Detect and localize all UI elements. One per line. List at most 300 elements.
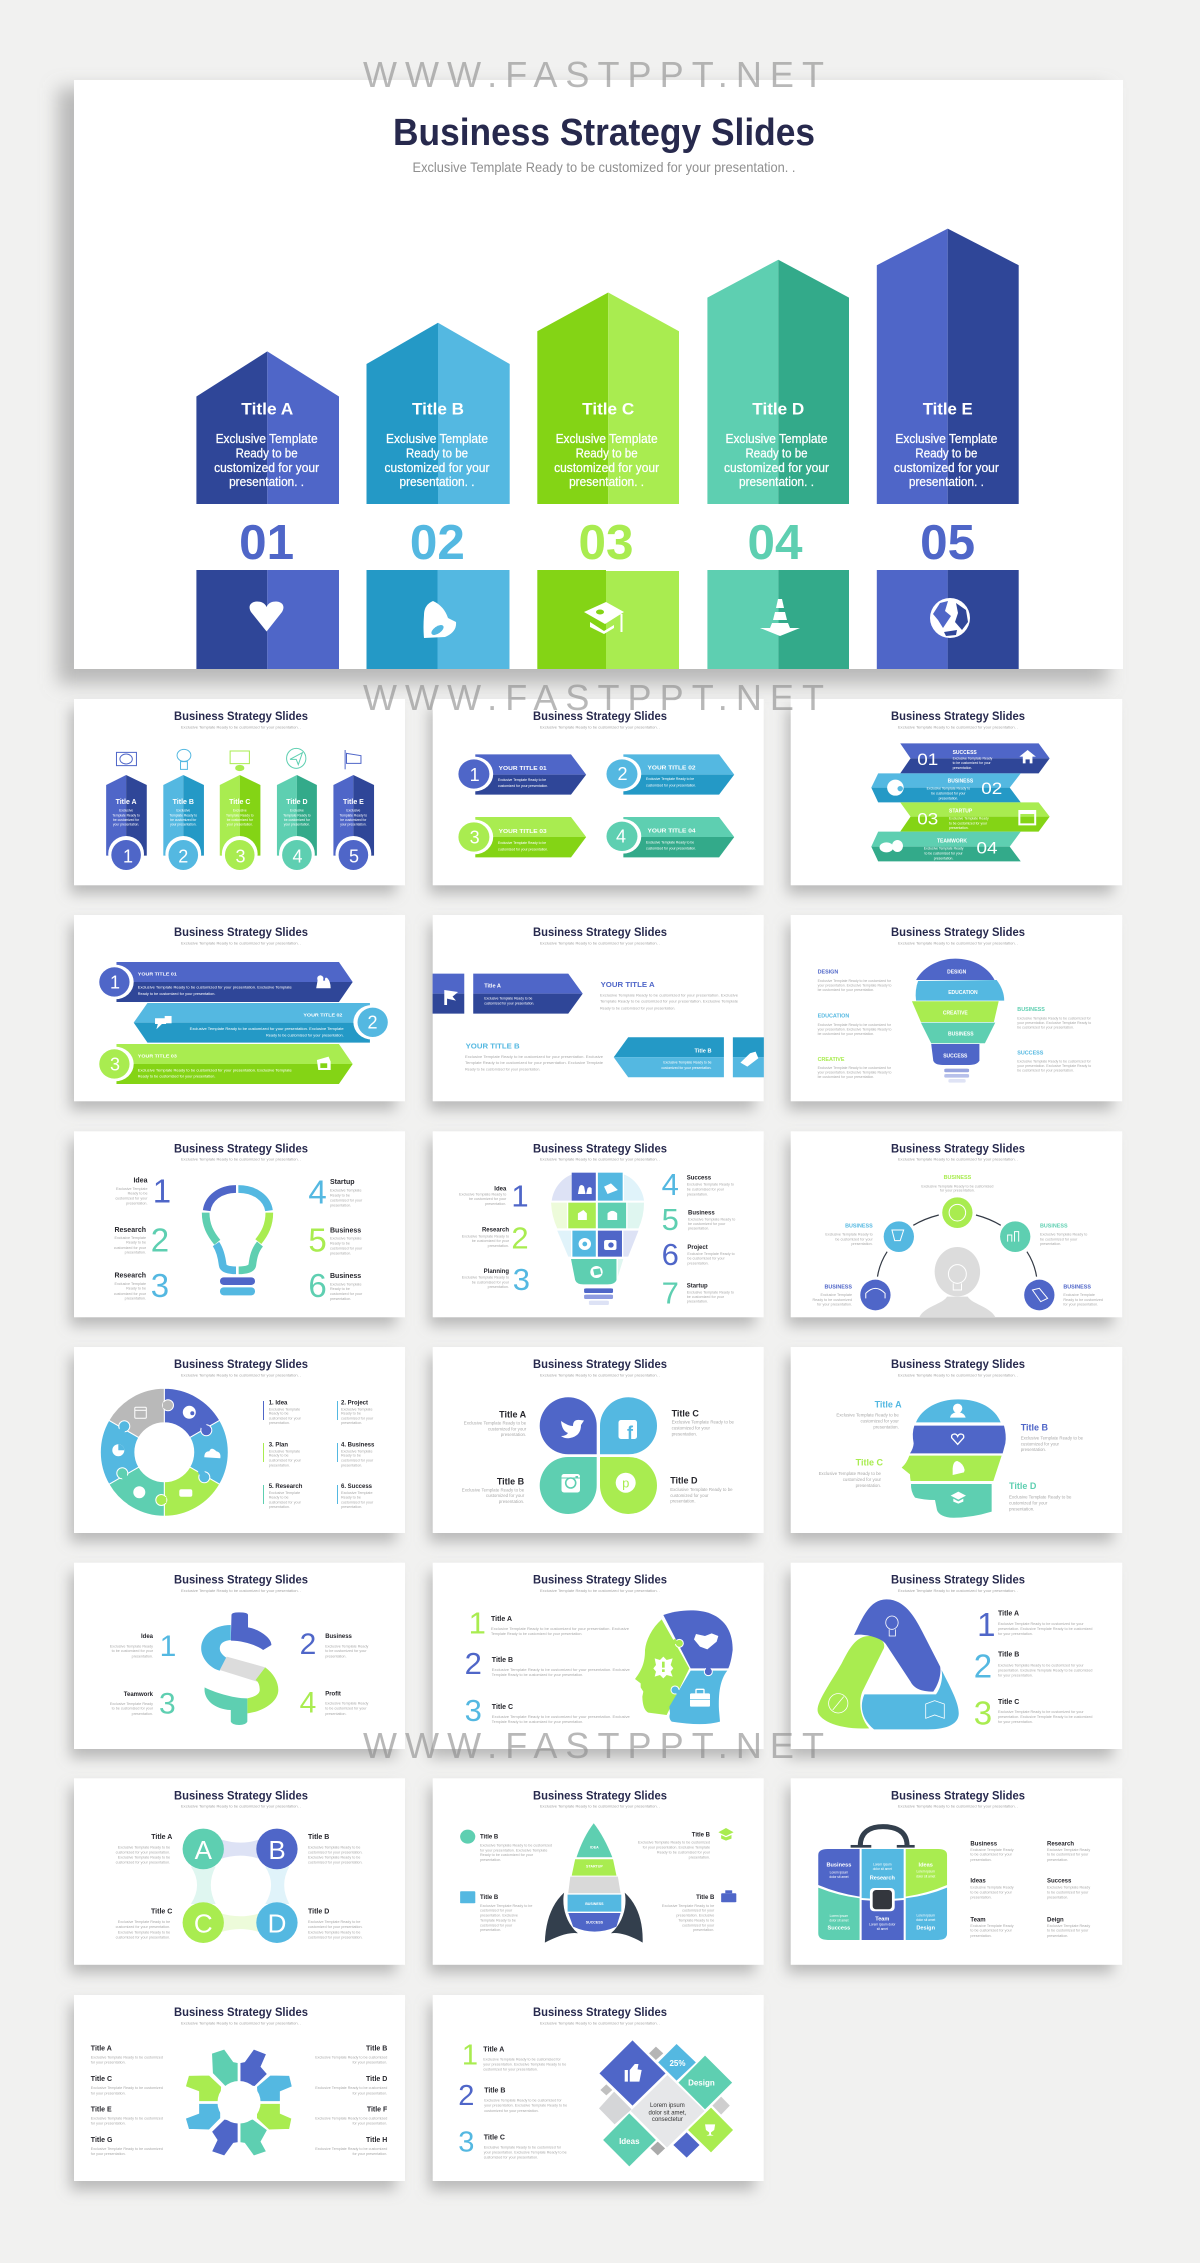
side labels: Exclusive Template Ready to be — [118, 1930, 170, 1934]
dollar labels: presentation. — [132, 1654, 153, 1658]
dollar labels: to be customized for your — [325, 1649, 367, 1653]
arrow labels: 2 — [178, 847, 188, 867]
slide heading: Business Strategy Slides — [891, 1574, 1025, 1587]
long ribbon text: YOUR TITLE 03 — [138, 1053, 177, 1058]
panel: slide 18 briefcase — [791, 1778, 1122, 1965]
side text blocks: your presentation. Exclusive Template Ready to — [1017, 1021, 1091, 1025]
side text blocks: be customized for your presentation. — [818, 1075, 874, 1079]
dollar labels: 1 — [160, 1630, 176, 1663]
long ribbon text: Ready to be customized for your presentation. — [138, 1074, 215, 1078]
band text: be customized for your — [931, 791, 966, 795]
briefcase panel labels: sit amet — [877, 1927, 888, 1931]
numbered text list: your presentation. Exclusive Template Ready to be — [483, 2063, 566, 2067]
diamond cluster — [599, 2040, 733, 2166]
left labels: for your presentation. — [91, 2122, 126, 2126]
band text: Exclusive Template Ready — [949, 816, 989, 820]
ribbon text — [470, 764, 696, 852]
text block A: Exclusive Template Ready to be customized for your presentation. Exclusive — [600, 994, 738, 998]
circle labels: BUSINESS — [824, 1284, 852, 1290]
panel: slide 7 outline bulb — [74, 1131, 405, 1317]
bulb layer labels — [943, 969, 978, 1059]
arrow column B: Exclusive Template — [386, 432, 488, 446]
panel: slide 16 ABCD circles — [74, 1778, 405, 1965]
left labels: Exclusive Template — [114, 1236, 146, 1240]
five arrow shapes with number circles — [106, 775, 374, 872]
slide subtitle: Exclusive Template Ready to be customized for your presentation. . — [181, 1805, 301, 1809]
left labels: for your presentation. — [91, 2091, 126, 2095]
clover labels: Exclusive Template Ready to be — [464, 1420, 527, 1425]
rocket right labels: customized for your — [682, 1923, 715, 1927]
numbers 1 to 6: 6 — [308, 1267, 327, 1304]
arrow labels: Title C — [229, 799, 250, 806]
triangle labels: for your presentation. — [998, 1673, 1033, 1677]
side labels: customized for your presentation. — [116, 1935, 170, 1939]
left labels: customized for your — [114, 1292, 147, 1296]
circle labels: Exclusive Template — [820, 1293, 852, 1297]
circle labels: for your presentation. — [1063, 1303, 1098, 1307]
right labels: for your presentation. — [352, 2091, 387, 2095]
panel: slide 20 diamonds — [433, 1995, 764, 2181]
head labels: Exclusive Template Ready to be — [819, 1471, 882, 1476]
rocket right labels: Exclusive Template Ready to be customized — [638, 1840, 710, 1844]
watermark middle: WWW.FASTPPT.NET — [363, 677, 824, 718]
rocket left labels: Title B — [480, 1895, 499, 1901]
circle letters: D — [268, 1909, 286, 1939]
slide subtitle: Exclusive Template Ready to be customized for your presentation. . — [540, 1373, 660, 1377]
arrow labels: be customized for — [113, 818, 140, 822]
numbered text list: Title C — [484, 2134, 505, 2141]
head labels: Title C — [856, 1458, 883, 1468]
watermark lower: WWW.FASTPPT.NET — [363, 1725, 824, 1766]
left labels: be customized for your — [472, 1239, 510, 1243]
slide subtitle: Exclusive Template Ready to be customized for your presentation. . — [181, 2021, 301, 2025]
panel: slide 4 long ribbons — [74, 915, 405, 1101]
left labels: Planning — [484, 1269, 509, 1275]
right labels: Exclusive Template Ready to — [687, 1290, 734, 1294]
slide heading: Business Strategy Slides — [891, 1789, 1025, 1802]
right labels: Ready to be — [330, 1193, 350, 1197]
right labels: be customized for your — [688, 1222, 726, 1226]
slide heading: Business Strategy Slides — [533, 926, 667, 939]
arrow labels: 4 — [292, 847, 303, 867]
arrow column D — [707, 260, 849, 504]
long ribbon text — [110, 971, 378, 1078]
linked circles — [183, 1829, 298, 1943]
dollar labels: Exclusive Template Ready — [325, 1644, 369, 1648]
numbers 01 to 05: 05 — [920, 516, 975, 570]
slide subtitle: Exclusive Template Ready to be customized for your presentation. . — [181, 725, 301, 729]
briefcase side labels: Exclusive Template Ready — [1047, 1924, 1090, 1928]
triangle labels: Exclusive Template Ready to be customized for your — [998, 1710, 1084, 1714]
text block A: Template Ready to be customized for your presentation. Exclusive Template — [600, 1000, 738, 1004]
triangle labels: Exclusive Template Ready to be customized for your — [998, 1622, 1084, 1626]
dollar labels: 4 — [300, 1686, 316, 1719]
right labels: be customized for your — [687, 1257, 725, 1261]
panel: slide 11 clover — [433, 1347, 764, 1533]
slide heading: Business Strategy Slides — [174, 926, 308, 939]
text block B — [465, 1042, 712, 1072]
numbered text list: customized for your presentation. — [484, 2156, 538, 2160]
puzzle ring labels: presentation. — [341, 1505, 362, 1509]
head labels: presentation. — [1021, 1447, 1046, 1452]
left labels: for your presentation. — [91, 2152, 126, 2156]
numbers 01 to 05: 03 — [578, 516, 634, 570]
right labels: presentation. — [688, 1227, 709, 1231]
right labels: Business — [330, 1227, 361, 1234]
right labels: Exclusive Template Ready to be customized — [315, 2086, 387, 2090]
circle labels: BUSINESS — [845, 1224, 873, 1230]
right labels: Exclusive Template Ready to — [687, 1183, 734, 1187]
side labels: Title C — [151, 1909, 172, 1916]
three long ribbons — [97, 962, 391, 1084]
briefcase side labels: Business — [970, 1841, 998, 1847]
side text blocks: be customized for your presentation. — [1017, 1069, 1074, 1073]
ribbon text: 2 — [617, 764, 628, 784]
right labels: Exclusive Template — [330, 1237, 362, 1241]
arrow column A: presentation. . — [229, 475, 304, 489]
right labels: for your presentation. — [352, 2152, 387, 2156]
left labels: be customized for your — [469, 1197, 507, 1201]
right labels: presentation. — [687, 1192, 708, 1196]
puzzle ring labels: presentation. — [341, 1463, 362, 1467]
slide subtitle: Exclusive Template Ready to be customized for your presentation. . — [898, 1589, 1018, 1593]
clover petals with social icons: p — [622, 1476, 629, 1490]
right labels: Exclusive Template Ready to — [688, 1217, 735, 1221]
puzzle ring labels: customized for your — [341, 1416, 374, 1420]
clover labels: customized for your — [488, 1426, 527, 1431]
triangle labels: Title A — [998, 1611, 1019, 1618]
main title: Business Strategy Slides — [393, 112, 815, 154]
head labels: customized for your — [1021, 1441, 1060, 1446]
arrow labels: be customized for — [340, 818, 367, 822]
rocket right labels: presentation. — [689, 1855, 710, 1859]
right labels — [687, 1176, 735, 1304]
arrow column C: customized for your — [554, 461, 659, 475]
watermark top: WWW.FASTPPT.NET — [363, 54, 824, 95]
right labels: customized for your — [330, 1198, 363, 1202]
briefcase panel labels: dolor sit amet — [916, 1918, 935, 1922]
dollar labels: Exclusive Template Ready — [325, 1702, 369, 1706]
puzzle head numbers and labels: Template Ready to be customized for your presentation. — [492, 1673, 583, 1677]
side text blocks — [818, 970, 1092, 1079]
dollar labels: presentation. — [325, 1654, 347, 1658]
rocket left labels: Ready to be customized for your — [480, 1853, 534, 1857]
head labels: Exclusive Template Ready to be — [1021, 1436, 1084, 1441]
puzzle ring labels: customized for your — [269, 1416, 302, 1420]
rocket left labels: Exclusive Template Ready to be — [480, 1904, 532, 1908]
band text: Exclusive Template Ready — [924, 846, 964, 850]
arrow labels: Exclusive — [119, 809, 133, 813]
head labels: presentation. — [856, 1483, 881, 1488]
arrow column E — [877, 229, 1019, 504]
slide heading: Business Strategy Slides — [174, 1789, 308, 1802]
arrow labels: Exclusive — [233, 809, 247, 813]
puzzle head numbers and labels: 3 — [465, 1693, 482, 1728]
briefcase side labels: presentation. — [1047, 1858, 1068, 1862]
left labels: customized for your — [114, 1246, 147, 1250]
bulb layer labels: CREATIVE — [943, 1011, 968, 1017]
right labels: be customized for your — [687, 1295, 725, 1299]
side text blocks: Exclusive Template Ready to be customized for — [818, 979, 892, 983]
right labels: Business — [330, 1273, 361, 1280]
arrow labels: 3 — [235, 847, 246, 867]
briefcase panel labels: Business — [826, 1863, 851, 1869]
left labels: presentation. — [488, 1285, 509, 1289]
bulb layer labels: EDUCATION — [948, 990, 978, 996]
side text blocks: Exclusive Template Ready to be customized for — [1017, 1060, 1092, 1064]
numbered text list: your presentation. Exclusive Template Ready to be — [484, 2104, 567, 2108]
left labels — [114, 1178, 148, 1301]
rocket left labels: customized for your — [480, 1909, 513, 1913]
dollar labels: presentation. — [132, 1712, 153, 1716]
rocket left labels: for your presentation. Exclusive Template — [480, 1848, 547, 1852]
line icons row — [116, 748, 361, 771]
icon tile: heart — [196, 570, 339, 669]
numbers 1 to 7 — [511, 1167, 679, 1310]
four zigzag bands — [871, 743, 1050, 861]
left labels: Title C — [91, 2076, 112, 2083]
slide subtitle: Exclusive Template Ready to be customized for your presentation. . — [898, 1373, 1018, 1377]
ribbon text: Exclusive Template Ready to be — [646, 777, 694, 781]
puzzle ring labels: customized for your — [341, 1500, 374, 1504]
panel: slide 6 layered bulb — [791, 915, 1122, 1101]
arrow labels: be customized for — [284, 818, 311, 822]
diamond text: Lorem ipsum — [650, 2103, 685, 2109]
numbered text list: Exclusive Template Ready to be customized for — [483, 2057, 561, 2061]
side labels: Title B — [308, 1834, 329, 1841]
arrow column B — [366, 323, 510, 504]
arrow column E: presentation. . — [909, 475, 984, 489]
arrow column D: Exclusive Template — [726, 432, 828, 446]
clover labels: customized for your — [486, 1493, 525, 1498]
right labels: Exclusive Template Ready to be customized — [315, 2147, 387, 2151]
puzzle head numbers and labels: Title C — [492, 1704, 513, 1711]
band text: Exclusive Template Ready to — [927, 786, 970, 790]
puzzle head numbers and labels: 2 — [465, 1646, 482, 1681]
slide subtitle: Exclusive Template Ready to be customized for your presentation. . — [898, 941, 1018, 945]
briefcase panel labels: Lorem ipsum — [916, 1914, 935, 1918]
side labels: Exclusive Template Ready to be — [308, 1920, 360, 1924]
rocket right labels: Template Ready to be — [678, 1918, 714, 1922]
triangle labels: Exclusive Template Ready to be customized for your — [998, 1663, 1084, 1667]
slide heading: Business Strategy Slides — [174, 1358, 308, 1371]
briefcase side labels: presentation. — [1047, 1934, 1068, 1938]
bulb layer labels: BUSINESS — [948, 1032, 974, 1038]
slide heading: Business Strategy Slides — [533, 710, 667, 723]
slide heading: Business Strategy Slides — [174, 710, 308, 723]
offset ribbon shapes and icons — [433, 974, 764, 1077]
side labels: customized for your presentation. — [116, 1851, 170, 1855]
briefcase side labels: Team — [970, 1917, 986, 1923]
numbers 1 to 7: 5 — [662, 1202, 679, 1237]
left labels: presentation. — [488, 1244, 509, 1248]
dollar labels: Teamwork — [124, 1692, 154, 1698]
clover labels — [462, 1408, 735, 1504]
left labels: presentation. — [485, 1202, 506, 1206]
right labels: Project — [687, 1245, 708, 1251]
puzzle ring labels: Exclusive Template — [341, 1407, 372, 1411]
long ribbon text: 1 — [110, 972, 120, 992]
puzzle ring chart — [100, 1388, 228, 1516]
band text: STARTUP — [949, 809, 973, 815]
dollar labels: Exclusive Template Ready — [110, 1644, 153, 1648]
clover labels: customized for your — [670, 1493, 709, 1498]
circle labels: be customized for your — [835, 1237, 873, 1241]
clover labels: Title B — [497, 1476, 525, 1486]
right labels: Ready to be — [330, 1287, 350, 1291]
triangle labels: presentation. Exclusive Template Ready to be customized — [998, 1627, 1092, 1631]
circle labels: for your presentation. — [817, 1303, 852, 1307]
puzzle ring labels — [263, 1401, 375, 1509]
left labels: Ready to be — [126, 1287, 146, 1291]
right labels: Business — [688, 1211, 715, 1217]
side labels: customized for your presentation. — [308, 1925, 363, 1929]
arrow column B: Ready to be — [406, 446, 468, 460]
circle labels: Exclusive Template Ready to — [825, 1233, 873, 1237]
text block B: Exclusive Template Ready to be — [663, 1061, 712, 1065]
layered head chart — [902, 1399, 1006, 1518]
numbered text list: 2 — [458, 2080, 474, 2112]
circle labels: BUSINESS — [1063, 1284, 1091, 1290]
side labels: customized for your presentation. — [116, 1861, 170, 1865]
arrow column C — [537, 292, 679, 504]
panel: slide 2 four ribbons — [433, 699, 764, 885]
numbers 1 to 6: 1 — [153, 1173, 171, 1210]
puzzle ring labels: Ready to be — [341, 1412, 361, 1416]
slide subtitle: Exclusive Template Ready to be customized for your presentation. . — [540, 1589, 660, 1593]
rocket left labels: Title B — [480, 1835, 499, 1841]
right labels: presentation. — [687, 1300, 708, 1304]
numbered text list: Exclusive Template Ready to be customized for — [484, 2099, 562, 2103]
icon tile: graduation cap — [537, 570, 679, 669]
diamond text: consectetur — [652, 2117, 683, 2123]
arrow column B: Title B — [412, 400, 464, 419]
slide subtitle: Exclusive Template Ready to be customized for your presentation. . — [540, 1158, 660, 1162]
numbers 01 to 05: 04 — [748, 516, 802, 570]
side text blocks: SUCCESS — [1017, 1050, 1044, 1056]
briefcase side labels: Exclusive Template Ready — [1047, 1848, 1090, 1852]
panel: slide 19 gear — [74, 1995, 405, 2181]
circle labels: Ready to be customized — [812, 1298, 852, 1302]
panel: slide 12 layered head — [791, 1347, 1122, 1533]
left labels: Title G — [91, 2137, 113, 2144]
circle labels: BUSINESS — [1040, 1224, 1068, 1230]
arrow column A: Exclusive Template — [216, 432, 318, 446]
ribbon text: YOUR TITLE 01 — [499, 766, 547, 772]
side labels: Exclusive Template Ready to be — [118, 1920, 170, 1924]
text block B: Title B — [694, 1048, 712, 1054]
puzzle ring labels: Ready to be — [341, 1454, 361, 1458]
rocket right labels: presentation. Exclusive — [676, 1914, 714, 1918]
rocket section labels: BUSINESS — [585, 1902, 604, 1906]
side text blocks: Exclusive Template Ready to be customized for — [818, 1023, 892, 1027]
triangle labels: presentation. Exclusive Template Ready to be customized — [998, 1715, 1092, 1719]
briefcase side labels: Deign — [1047, 1917, 1064, 1923]
long ribbon text: Exclusive Template Ready to be customized for your presentation. Exclusive Template — [138, 1068, 292, 1072]
dollar labels — [110, 1628, 369, 1720]
long ribbon text: 2 — [367, 1013, 378, 1033]
side labels: Exclusive Template Ready to be — [308, 1856, 360, 1860]
arrow labels: Title B — [173, 799, 194, 806]
right labels: Success — [687, 1176, 712, 1182]
dollar labels: 2 — [300, 1628, 316, 1661]
panel: slide 13 dollar sign — [74, 1563, 405, 1749]
circle labels: be customized for your — [1040, 1237, 1078, 1241]
text block B: YOUR TITLE B — [466, 1042, 520, 1051]
band text: 01 — [917, 750, 938, 769]
briefcase side labels: presentation. — [970, 1934, 992, 1938]
rocket left labels: Template Ready to be — [480, 1918, 516, 1922]
right labels: Exclusive Template — [330, 1188, 362, 1192]
head labels: Title B — [1021, 1423, 1049, 1433]
head labels: customized for your — [1009, 1500, 1048, 1505]
dollar labels: to be customized for your — [325, 1706, 367, 1710]
head labels: presentation. — [873, 1424, 899, 1429]
briefcase side labels: presentation. — [970, 1896, 992, 1900]
puzzle head numbers and labels: Exclusive Template Ready to be customized for your presentation. Exclusive — [491, 1627, 629, 1631]
arrow column B: customized for your — [384, 461, 490, 475]
puzzle ring labels: Exclusive Template — [341, 1491, 372, 1495]
left labels: for your presentation. — [91, 2061, 126, 2065]
slide subtitle: Exclusive Template Ready to be customized for your presentation. . — [540, 1805, 660, 1809]
band text: 03 — [917, 809, 938, 828]
head labels: Exclusive Template Ready to be — [1009, 1495, 1072, 1500]
puzzle ring labels: customized for your — [341, 1458, 374, 1462]
arrow labels: Exclusive — [290, 809, 304, 813]
dollar labels: Profit — [325, 1692, 341, 1698]
triangle labels: Title B — [998, 1652, 1019, 1659]
briefcase panel labels: dolor sit amet — [916, 1874, 935, 1878]
side text blocks: BUSINESS — [1017, 1007, 1045, 1013]
side labels: Exclusive Template Ready to be — [308, 1930, 360, 1934]
briefcase side labels: Exclusive Template Ready — [970, 1924, 1014, 1928]
long ribbon text: Exclusive Template Ready to be customized for your presentation. Exclusive Template — [138, 986, 292, 990]
ribbon text: Exclusive Template Ready to be — [646, 840, 694, 844]
side labels — [116, 1834, 363, 1939]
arrow column D: presentation. . — [739, 475, 814, 489]
text block B: Exclusive Template Ready to be customized for your presentation. Exclusive — [465, 1055, 603, 1059]
slide heading: Business Strategy Slides — [533, 1574, 667, 1587]
arrow labels: Exclusive — [176, 809, 190, 813]
slide heading: Business Strategy Slides — [533, 1142, 667, 1155]
numbers 1 to 6: 2 — [151, 1221, 169, 1258]
tiled bulb — [551, 1173, 644, 1305]
dollar labels: Business — [325, 1634, 353, 1640]
briefcase panel labels: Lorem ipsum dolor — [869, 1923, 896, 1927]
band text — [917, 750, 1002, 860]
ribbon text: customized for your presentation. — [498, 848, 548, 852]
side text blocks: your presentation. Exclusive Template Ready to — [818, 1027, 892, 1031]
puzzle ring labels: Exclusive Template — [341, 1449, 372, 1453]
triangle labels — [974, 1606, 1092, 1731]
ribbon text: 3 — [470, 827, 480, 847]
circle labels — [812, 1175, 1103, 1307]
slide heading: Business Strategy Slides — [533, 1358, 667, 1371]
puzzle ring labels: Ready to be — [269, 1495, 289, 1499]
right labels: Title D — [366, 2076, 387, 2083]
briefcase panel labels: dolor sit amet — [873, 1867, 892, 1871]
arrow labels: your presentation. — [284, 823, 310, 827]
left labels: Research — [114, 1227, 146, 1234]
head labels — [819, 1399, 1084, 1511]
left labels: Exclusive Template — [114, 1282, 146, 1286]
left labels: Exclusive Template Ready to be customized — [91, 2086, 163, 2090]
rocket right labels: Title B — [692, 1833, 711, 1839]
side text blocks: be customized for your presentation. — [1017, 1025, 1074, 1029]
side labels: Title A — [151, 1834, 172, 1841]
rocket section labels: SUCCESS — [586, 1920, 604, 1924]
layered bulb chart — [912, 959, 1004, 1083]
